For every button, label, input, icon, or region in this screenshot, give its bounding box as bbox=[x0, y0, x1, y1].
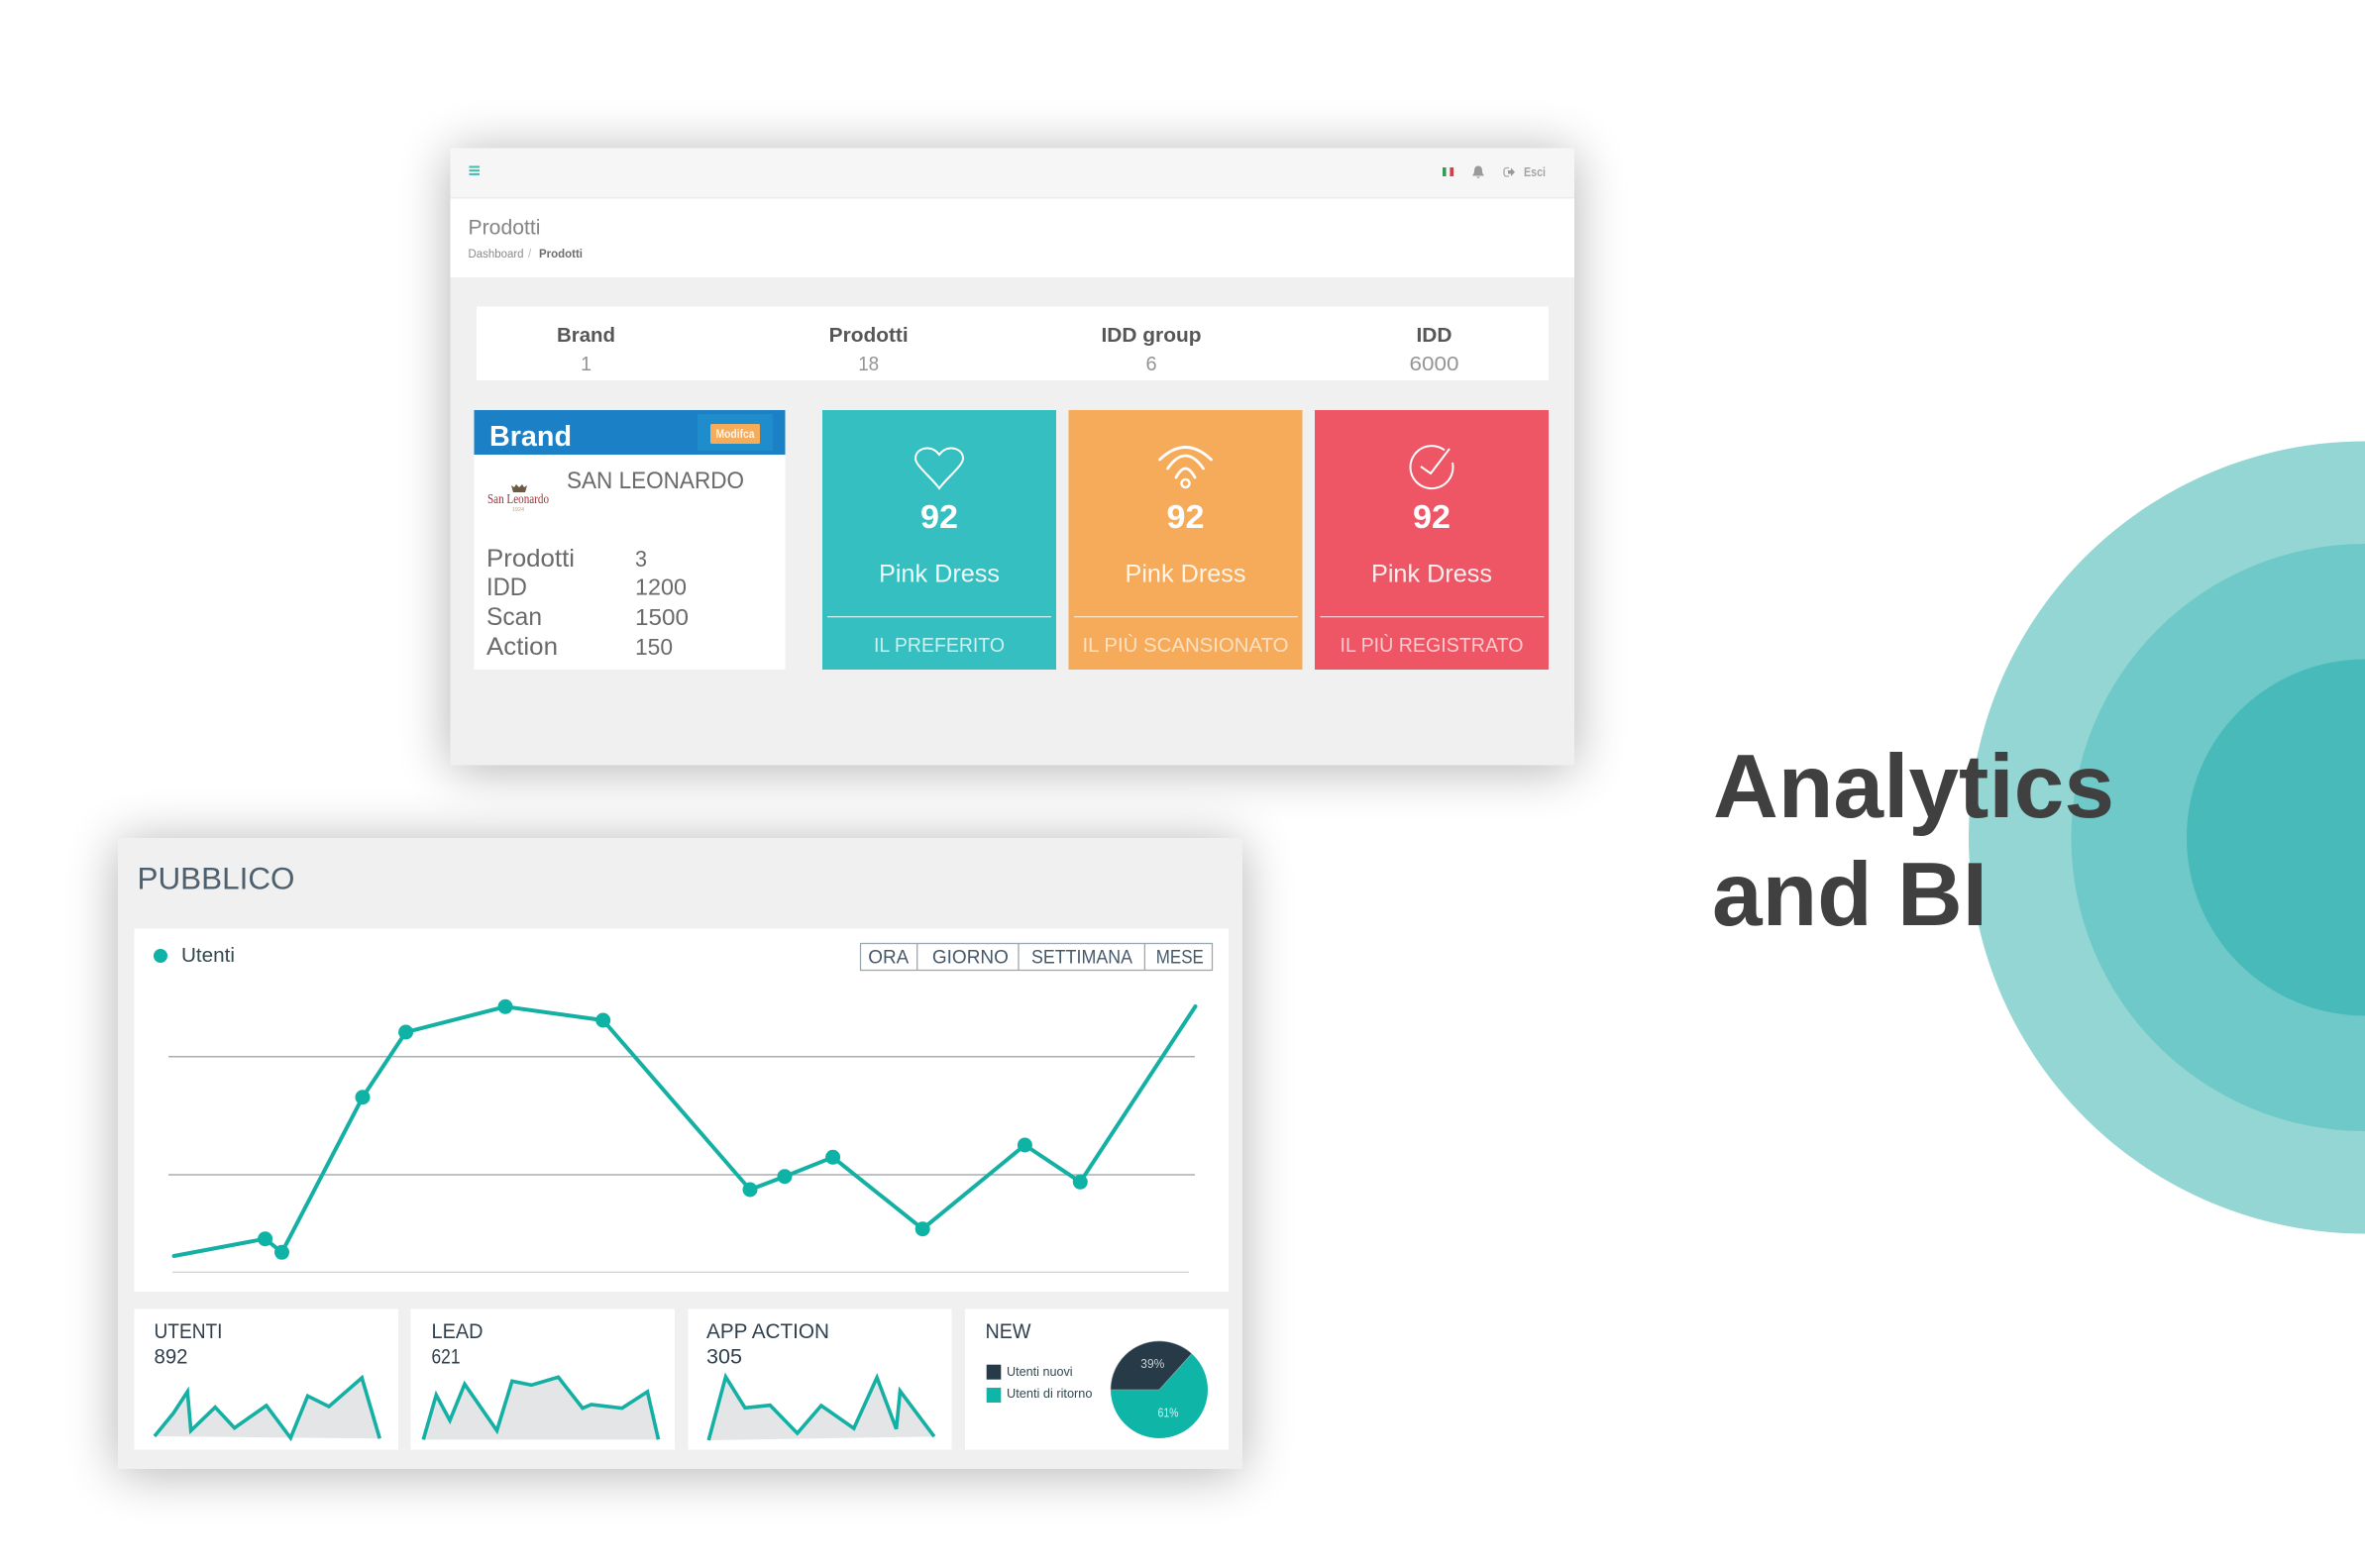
tile: il preferito: IL PREFERITO bbox=[874, 635, 1005, 657]
summary statistics bar: IDD group bbox=[1102, 324, 1201, 347]
pie legend bbox=[987, 1364, 1092, 1403]
time range selector bbox=[860, 943, 1213, 971]
data points bbox=[258, 999, 1088, 1260]
panel: product dashboard bbox=[450, 149, 1574, 769]
summary statistics bar: Brand bbox=[557, 324, 615, 347]
page heading and breadcrumb bbox=[450, 198, 1574, 277]
time range selector: SETTIMANA bbox=[1031, 947, 1132, 969]
tile: il più scansionato: Pink Dress bbox=[1126, 561, 1246, 588]
brand metrics list bbox=[486, 545, 689, 661]
sparkline: app action bbox=[708, 1377, 934, 1440]
tile: il più scansionato bbox=[1068, 410, 1302, 670]
card: lead bbox=[410, 1309, 675, 1450]
time range selector: MESE bbox=[1156, 947, 1204, 969]
card: utenti: UTENTI bbox=[155, 1319, 222, 1343]
panel heading: PUBBLICO bbox=[137, 860, 295, 895]
summary statistics bar: Prodotti bbox=[829, 324, 909, 347]
time range selector: GIORNO bbox=[932, 947, 1009, 969]
data line bbox=[174, 1006, 1196, 1256]
tile: il più registrato: Pink Dress bbox=[1371, 561, 1492, 588]
brand metrics list: 1200 bbox=[635, 575, 687, 600]
brand metrics list: 1500 bbox=[635, 604, 689, 630]
panel: pubblico analytics bbox=[118, 838, 1242, 1473]
tile: il più registrato: IL PIÙ REGISTRATO bbox=[1340, 634, 1524, 657]
summary statistics bar: 6 bbox=[1145, 354, 1157, 375]
tile: il più registrato: 92 bbox=[1413, 498, 1451, 535]
logo: San Leonardo bbox=[487, 484, 549, 513]
logo: San Leonardo: 1924 bbox=[512, 507, 524, 513]
card: brand: Brand bbox=[489, 421, 572, 453]
card: utenti: 892 bbox=[155, 1345, 188, 1369]
title: Analytics and BI: Analytics bbox=[1713, 737, 2114, 837]
pie legend: Utenti di ritorno bbox=[1007, 1386, 1092, 1401]
brand metrics list: 150 bbox=[635, 634, 673, 660]
card: brand bbox=[474, 410, 785, 670]
chart legend: Utenti bbox=[181, 945, 235, 967]
decorative concentric circles bbox=[1969, 442, 2365, 1234]
edit button: Modifca bbox=[715, 427, 755, 441]
logo: San Leonardo: San Leonardo bbox=[487, 491, 549, 506]
title: Analytics and BI: and BI bbox=[1712, 845, 1988, 945]
icon: notification bell bbox=[1472, 166, 1484, 178]
page heading and breadcrumb: Dashboard bbox=[468, 249, 523, 261]
pie chart bbox=[1111, 1341, 1208, 1438]
sparkline: utenti bbox=[155, 1378, 379, 1438]
tile: il più scansionato: IL PIÙ SCANSIONATO bbox=[1082, 634, 1288, 657]
summary statistics bar bbox=[477, 307, 1549, 380]
icon: exit bbox=[1504, 168, 1515, 176]
tile: il più registrato bbox=[1315, 410, 1549, 670]
logout label: Esci bbox=[1524, 165, 1546, 179]
page heading and breadcrumb: Prodotti bbox=[468, 216, 541, 240]
summary statistics bar: 1 bbox=[581, 354, 591, 375]
time range selector: ORA bbox=[868, 947, 909, 969]
tile: il preferito: 92 bbox=[920, 498, 958, 535]
card: app action bbox=[688, 1309, 951, 1450]
chart legend bbox=[154, 945, 235, 967]
page heading and breadcrumb: / bbox=[528, 249, 532, 261]
icon: Italian flag bbox=[1443, 167, 1453, 176]
icon: hamburger menu bbox=[470, 166, 480, 175]
card: app action: APP ACTION bbox=[706, 1319, 829, 1343]
sparkline: lead bbox=[423, 1377, 659, 1439]
card: lead: 621 bbox=[432, 1345, 460, 1369]
summary statistics bar: 6000 bbox=[1409, 354, 1458, 375]
pie chart: 61% bbox=[1157, 1405, 1179, 1419]
brand metrics list: Prodotti bbox=[486, 545, 575, 573]
brand metrics list: IDD bbox=[486, 574, 527, 601]
card: utenti bbox=[135, 1309, 398, 1450]
card: new users pie: NEW bbox=[985, 1319, 1031, 1343]
tile: il preferito: Pink Dress bbox=[879, 561, 1000, 588]
edit button bbox=[710, 424, 760, 444]
tile: il preferito bbox=[822, 410, 1056, 670]
card: brand: SAN LEONARDO bbox=[567, 468, 744, 494]
top navigation bar bbox=[450, 149, 1574, 198]
brand metrics list: Action bbox=[486, 633, 558, 661]
pie legend: Utenti nuovi bbox=[1007, 1364, 1073, 1379]
icon: wifi bbox=[1159, 448, 1211, 487]
card: new users pie bbox=[965, 1309, 1229, 1450]
icon: check circle bbox=[1411, 446, 1453, 488]
summary statistics bar: IDD bbox=[1417, 324, 1452, 347]
line chart: utenti bbox=[135, 929, 1229, 1292]
icon: heart bbox=[915, 448, 963, 488]
brand metrics list: Scan bbox=[486, 603, 542, 631]
card: app action: 305 bbox=[706, 1345, 742, 1369]
card: lead: LEAD bbox=[432, 1319, 484, 1343]
summary statistics bar: 18 bbox=[858, 354, 879, 375]
title: Analytics and BI bbox=[1712, 737, 2114, 945]
tile: il più scansionato: 92 bbox=[1167, 498, 1205, 535]
page heading and breadcrumb: Prodotti bbox=[539, 249, 583, 261]
brand metrics list: 3 bbox=[635, 546, 647, 572]
pie chart: 39% bbox=[1140, 1356, 1165, 1371]
